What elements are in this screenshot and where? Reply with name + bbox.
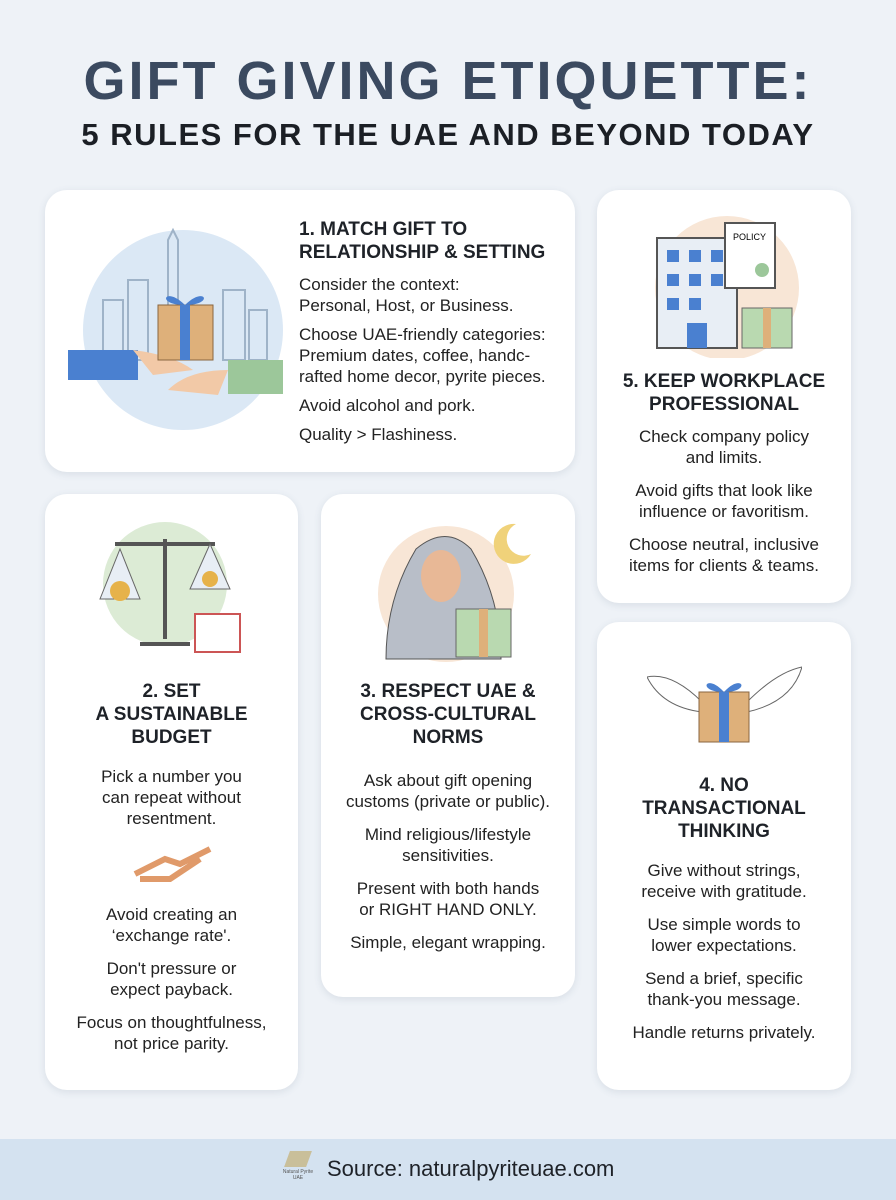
heading 2: A SUSTAINABLE (96, 704, 248, 725)
panel: rule 3 (321, 494, 575, 997)
heading 4: 4. NO (699, 775, 749, 796)
text 3: Ask about gift opening (364, 771, 532, 790)
heading 5: 5. KEEP WORKPLACE (623, 371, 825, 392)
text 2b: ‘exchange rate'. Don't pressure or (107, 926, 236, 978)
heading 3 (360, 681, 536, 748)
title: GIFT GIVING ETIQUETTE: (83, 51, 812, 111)
panel: rule 5 (597, 190, 851, 603)
text 4: thank-you message. Handle returns privately. (632, 990, 816, 1042)
text 2b: not price parity. (114, 1034, 229, 1053)
heading 2: BUDGET (131, 727, 212, 748)
text 2b: expect payback. Focus on thoughtfulness, (77, 980, 266, 1032)
icon: office and policy (655, 216, 799, 358)
text 3: customs (private or public). Mind religious/lifestyle (346, 792, 550, 844)
logo: Natural Pyrite UAE (283, 1169, 313, 1181)
text 3: or RIGHT HAND ONLY. Simple, elegant wrapping. (350, 900, 546, 952)
text 4: Give without strings, (647, 861, 801, 880)
icon: scale (99, 522, 241, 653)
text 2b: Avoid creating an (106, 905, 237, 924)
text 1: Consider the context: (299, 275, 460, 294)
heading 3: 3. RESPECT UAE & (360, 681, 536, 702)
text 2: can repeat without (102, 788, 241, 807)
text 1: Personal, Host, or Business. Choose UAE-friendly categories: (299, 296, 546, 344)
text 5: Check company policy (639, 427, 809, 446)
panel: rule 2 (45, 494, 298, 1090)
panel: rule 1 (45, 190, 575, 472)
heading 3: NORMS (413, 727, 483, 748)
text 5 (629, 427, 819, 575)
text 4: lower expectations. Send a brief, specific (645, 936, 803, 988)
text 2b (77, 905, 266, 1053)
heading 2: 2. SET (142, 681, 201, 702)
text 2: Pick a number you (101, 767, 242, 786)
heading 4: THINKING (678, 821, 770, 842)
text 1 (299, 275, 546, 444)
icon: woman with gift and moon (378, 524, 531, 662)
text 4: receive with gratitude. Use simple words to (641, 882, 807, 934)
text 5: influence or favoritism. Choose neutral, inclusive (629, 502, 819, 554)
subtitle: 5 RULES FOR THE UAE AND BEYOND TODAY (81, 117, 815, 152)
icon: handshake (134, 846, 212, 882)
panel: rule 4 (597, 622, 851, 1090)
heading 2 (96, 681, 248, 748)
footer (0, 1139, 896, 1200)
heading 4: TRANSACTIONAL (642, 798, 806, 819)
icon: winged gift (647, 666, 802, 742)
heading 5: PROFESSIONAL (649, 394, 799, 415)
text 5: and limits. Avoid gifts that look like (635, 448, 813, 500)
text 3: sensitivities. Present with both hands (357, 846, 539, 898)
source text: Source: naturalpyriteuae.com (327, 1156, 614, 1181)
text 1: Premium dates, coffee, handc- (299, 346, 530, 365)
text 2 (101, 767, 242, 828)
heading 1: 1. MATCH GIFT TO RELATIONSHIP & SETTING (299, 219, 545, 263)
logo (283, 1151, 313, 1181)
heading 5 (623, 371, 825, 415)
text 5: items for clients & teams. (629, 556, 819, 575)
text 2: resentment. (127, 809, 216, 828)
heading 3: CROSS-CULTURAL (360, 704, 536, 725)
text 4 (632, 861, 816, 1042)
heading 4 (642, 775, 806, 842)
text 3 (346, 771, 550, 952)
text 1: rafted home decor, pyrite pieces. Avoid alcohol and pork. Quality > Flashiness. (299, 367, 546, 444)
icon: city and gift hands (68, 228, 283, 430)
icon: office and policy: POLICY (733, 232, 766, 242)
